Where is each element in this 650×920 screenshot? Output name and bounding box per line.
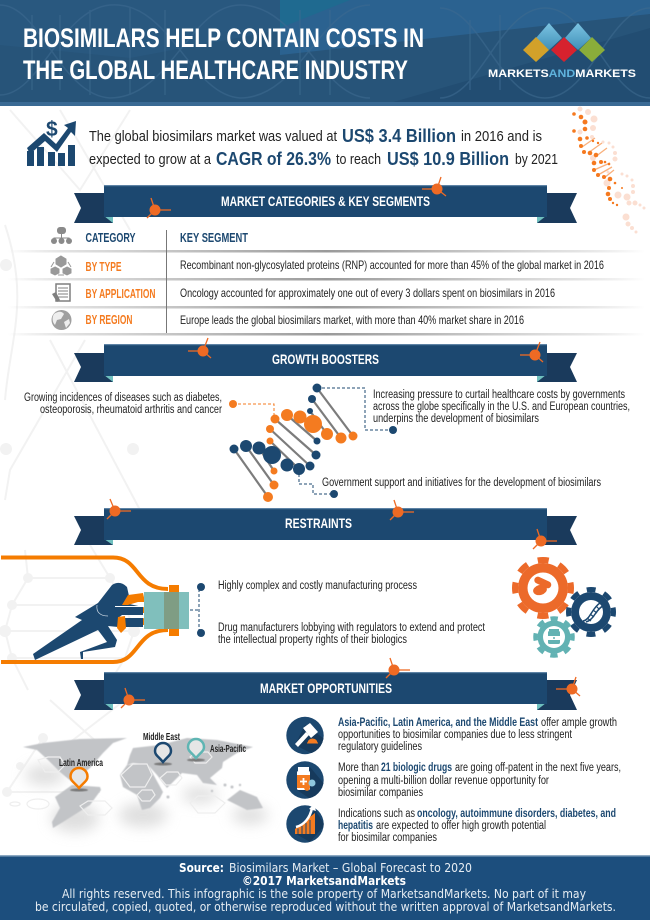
- intro text: in 2016 and is: [461, 128, 542, 145]
- ribbon: growth boosters: GROWTH BOOSTERS: [272, 351, 379, 367]
- opportunities text: biosimilar companies: [338, 787, 423, 799]
- molecule icons: [188, 338, 543, 362]
- opportunities text: for biosimilar companies: [338, 832, 437, 844]
- table: categories and key segments: BY APPLICATION: [86, 287, 156, 301]
- opportunities text: Indications such as: [338, 808, 415, 820]
- man: [33, 583, 143, 660]
- bottle and man pushing: [1, 558, 189, 662]
- icon: by application document: [52, 284, 70, 302]
- molecule icons: [121, 658, 580, 708]
- intro text: to reach: [336, 151, 381, 168]
- intro text: expected to grow at a: [89, 151, 212, 168]
- table: categories and key segments: KEY SEGMENT: [180, 230, 248, 245]
- icon: growth bars: [286, 804, 325, 843]
- footer: [0, 855, 650, 920]
- restraints text with connector: Highly complex and costly manufacturing process: [218, 580, 417, 592]
- ribbon: restraints: RESTRAINTS: [285, 515, 352, 531]
- growth boosters text: [24, 389, 630, 489]
- logo: MarketsandMarkets: [488, 23, 636, 80]
- orange DNA decoration: [572, 106, 646, 234]
- restraints text with connector: the intellectual property rights of their biologics: [218, 634, 407, 646]
- growth boosters text: underpins the development of biosimilars: [373, 413, 539, 425]
- opportunities text: opportunities to biosimilar companies due to less stringent: [338, 729, 573, 741]
- opportunities text: 21 biologic drugs: [381, 762, 452, 774]
- restraints text with connector: [190, 580, 486, 646]
- footer: All rights reserved. This infographic is the sole property of MarketsandMarkets. No part of it may: [62, 887, 586, 901]
- world map with pins: Latin America: [59, 758, 103, 769]
- icon: gavel: [286, 717, 326, 755]
- opportunities text: opening a multi-billion dollar revenue opportunity for: [338, 775, 549, 787]
- opportunities text: regulatory guidelines: [338, 741, 422, 753]
- molecule icons: [147, 177, 446, 218]
- ribbon: growth boosters: [74, 344, 577, 382]
- table: categories and key segments: BY TYPE: [86, 260, 122, 274]
- restraints text with connector: Drug manufacturers lobbying with regulators to extend and protect: [218, 622, 486, 634]
- table: categories and key segments: BY REGION: [86, 313, 132, 327]
- opportunities text: [338, 717, 621, 844]
- title: THE GLOBAL HEALTHCARE INDUSTRY: [23, 55, 408, 85]
- table: categories and key segments: CATEGORY: [86, 230, 136, 245]
- opportunities text: are expected to offer high growth potential: [376, 820, 546, 832]
- footer: Biosimilars Market – Global Forecast to 2020: [229, 861, 472, 875]
- icon: medicine bottle: [286, 761, 325, 800]
- growth boosters text: osteoporosis, rheumatoid arthritis and cancer: [40, 404, 222, 416]
- opportunities text: Asia-Pacific, Latin America, and the Middle East: [338, 717, 538, 729]
- opportunities text: More than: [338, 762, 379, 774]
- world map with pins: Asia-Pacific: [210, 744, 246, 755]
- ribbon: market categories: [74, 185, 577, 223]
- background DNA watermark: [0, 110, 140, 797]
- ribbon: market opportunities: MARKET OPPORTUNITIES: [260, 680, 392, 696]
- icon: navy gear with DNA: [565, 586, 617, 638]
- intro text: by 2021: [515, 151, 558, 168]
- intro text: [89, 126, 558, 169]
- icon: orange gear with pills: [510, 555, 576, 621]
- intro text: CAGR of 26.3%: [216, 149, 331, 169]
- intro text: US$ 10.9 Billion: [387, 149, 509, 169]
- icon: teal gear with bottle: [532, 615, 576, 659]
- pin: Asia-Pacific: [187, 739, 205, 762]
- intro text: The global biosimilars market was valued at: [89, 128, 338, 145]
- pin: Latin America: [70, 768, 88, 792]
- table: categories and key segments: Europe leads the global biosimilars market, with more than 40% market share in 2016: [180, 313, 524, 327]
- ribbon: market categories: MARKET CATEGORIES & KEY SEGMENTS: [221, 193, 430, 209]
- ribbon: restraints: [74, 508, 577, 545]
- icon: growth chart with dollar: [27, 118, 76, 166]
- icon: by type cubes: [51, 256, 71, 275]
- table: categories and key segments: [8, 230, 645, 336]
- icon: category hierarchy: [51, 227, 72, 244]
- pin: Middle East: [154, 743, 172, 766]
- title: BIOSIMILARS HELP CONTAIN COSTS IN: [23, 23, 424, 53]
- world map with pins: [10, 732, 268, 832]
- footer: Source:: [179, 861, 224, 875]
- growth boosters text: Growing incidences of diseases such as diabetes,: [24, 392, 222, 404]
- DNA helix diagram with callouts: [229, 384, 397, 502]
- opportunities text: offer ample growth: [541, 717, 617, 729]
- icon: growth chart with dollar: $: [46, 118, 58, 141]
- opportunities text: hepatitis: [338, 820, 373, 832]
- header banner: [0, 0, 650, 106]
- logo: MarketsandMarkets: MARKETS AND MARKETS: [488, 68, 636, 80]
- footer: ©2017 MarketsandMarkets: [242, 874, 406, 888]
- molecule icons: [107, 499, 557, 549]
- intro text: US$ 3.4 Billion: [342, 126, 456, 146]
- world map with pins: Middle East: [143, 732, 180, 743]
- icon: by region globe: [52, 310, 72, 330]
- ribbon: market opportunities: [74, 672, 577, 710]
- title: [23, 23, 424, 85]
